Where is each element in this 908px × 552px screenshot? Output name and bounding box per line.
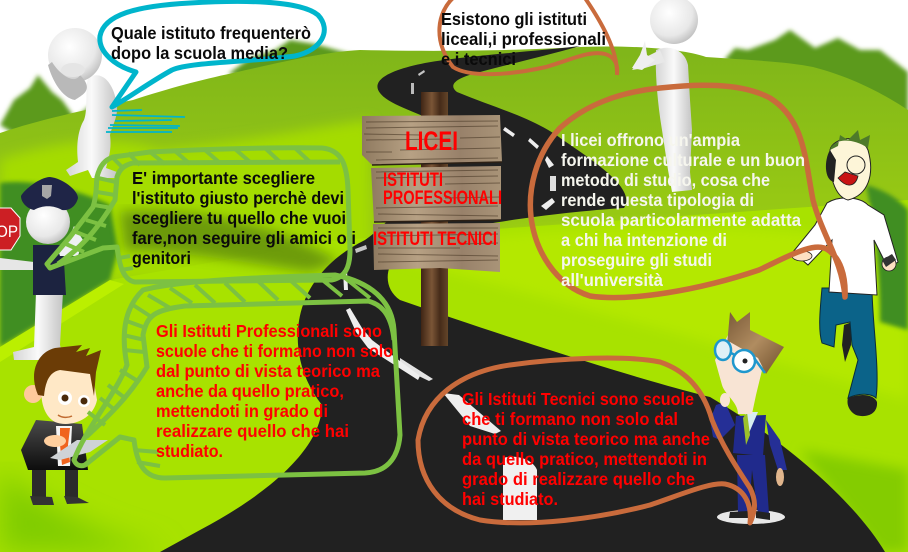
bubble text: istituti tecnici [462,389,710,509]
far trees [0,30,908,150]
speech bubble: istituti professionali [74,275,400,478]
bubble text: istituti professionali: Gli Istituti Professionali sono [156,321,382,341]
sign label: licei: LICEI [405,126,458,156]
figure: policeman with stop sign [0,177,83,360]
figure: headphones man [792,130,898,416]
speech bubble: istituti tecnici [418,358,754,523]
scribble lines [106,110,185,132]
road [160,46,885,552]
bubble text: tipologie di istituti: liceali,i professionali [441,29,606,49]
bubble text: licei: proseguire gli studi [561,250,712,270]
bubble text: licei: a chi ha intenzione di [561,230,727,250]
bubble text: tipologie di istituti [441,9,606,69]
signpost [362,92,502,346]
bubble text: importante: fare,non seguire gli amici o i [132,228,356,248]
bubble text: licei: rende questa tipologia di [561,190,754,210]
bubble text: istituti tecnici: punto di vista teorico ma anche [462,429,710,449]
bubble text: question [111,23,311,63]
speech bubble: tipologie di istituti [439,0,617,75]
sign label: istituti tecnici: ISTITUTI TECNICI [373,229,497,250]
figure: businessman with tablet [21,345,108,505]
bubble text: istituti tecnici: che ti formano non solo dal [462,409,678,429]
bubble text: istituti professionali: dal punto di vista teorico ma [156,361,380,381]
bubble text: importante [132,168,356,268]
sign label: istituti professionali [383,170,502,209]
bubble text: istituti tecnici: hai studiato. [462,489,558,509]
bubble text: question: dopo la scuola media? [111,43,288,63]
bubble text: istituti tecnici: da quello pratico, mettendoti in [462,449,707,469]
sign label: istituti professionali: ISTITUTI [383,170,443,191]
bubble text: istituti professionali: realizzare quello che hai [156,421,349,441]
bubble text: licei: scuola particolarmente adatta [561,210,801,230]
bubble text: importante: genitori [132,248,191,268]
right dark green field [866,185,908,330]
bubble text: istituti professionali: scuole che ti formano non solo [156,341,393,361]
bubble text: licei [561,130,805,290]
bubble text: istituti professionali: studiato. [156,441,223,461]
left dark green field [0,182,118,347]
figure: thumbs-up 3D man [632,0,698,192]
lime ground [0,200,908,552]
bubble text: istituti professionali [156,321,393,461]
bubble text: licei: formazione culturale e un buon [561,150,805,170]
bubble text: istituti professionali: mettendoti in grado di [156,401,328,421]
bubble text: question: Quale istituto frequenterò [111,23,311,43]
speech bubble: importante [47,148,356,282]
bubble text: importante: l'istituto giusto perchè devi [132,188,344,208]
bubble text: istituti professionali: anche da quello pratico, [156,381,344,401]
bubble text: licei: metodo di studio, cosa che [561,170,770,190]
bubble text: istituti tecnici: Gli Istituti Tecnici sono scuole [462,389,694,409]
bubble text: importante: scegliere tu quello che vuoi [132,208,346,228]
figure: glasses man thinking [710,312,787,524]
sign label: istituti professionali: PROFESSIONALI [383,188,502,209]
bubble text: licei: all'università [561,270,663,290]
figure: worried 3D man [48,28,117,178]
speech bubble: licei [530,85,845,298]
bubble text: tipologie di istituti: e i tecnici [441,49,516,69]
bubble text: licei: I licei offrono un'ampia [561,130,740,150]
bubble text: tipologie di istituti: Esistono gli istituti [441,9,587,29]
bubble text: importante: E' importante scegliere [132,168,315,188]
bubble text: istituti tecnici: grado di realizzare quello che [462,469,695,489]
speech bubble: question [100,1,324,132]
road dashes [343,70,556,520]
